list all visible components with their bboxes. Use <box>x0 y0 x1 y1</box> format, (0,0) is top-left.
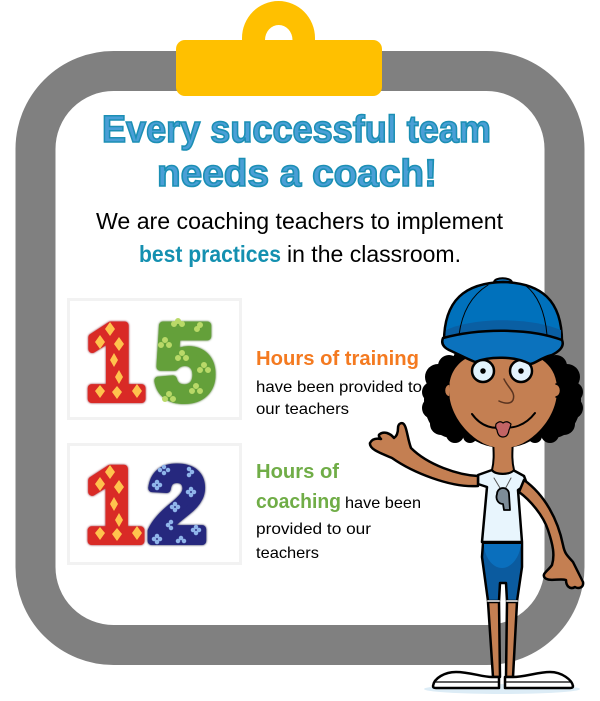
stat: hours of training: our teachers <box>256 401 349 418</box>
shirt <box>478 470 527 542</box>
ears <box>444 384 560 397</box>
cap <box>442 278 563 364</box>
lips <box>496 422 511 437</box>
shorts <box>482 543 522 601</box>
subtitle <box>96 208 504 267</box>
eyes <box>472 360 532 382</box>
character: coach <box>370 278 583 694</box>
mouth <box>472 413 535 428</box>
title <box>102 109 491 195</box>
digit 2: 2 <box>148 447 206 564</box>
shoes <box>433 672 573 688</box>
right arm <box>519 480 583 588</box>
left arm <box>370 423 478 486</box>
stat: hours of training: have been provided to <box>256 379 422 396</box>
number card: 15 <box>68 300 240 422</box>
stat: hours of coaching <box>256 461 421 562</box>
stat: hours of coaching: provided to our <box>256 521 372 538</box>
legs <box>488 602 517 677</box>
digit 5: 5 <box>155 302 215 422</box>
stat: hours of coaching: teachers <box>256 545 319 562</box>
stat: hours of training <box>256 348 422 418</box>
whistle <box>494 478 511 510</box>
digit 1: 1 <box>85 302 145 422</box>
clipboard clip <box>176 1 382 96</box>
subtitle: best practices <box>139 241 281 267</box>
title: needs a coach! <box>157 153 437 195</box>
stat: hours of coaching: coaching <box>256 491 341 513</box>
neck <box>492 440 514 474</box>
nose <box>499 379 514 403</box>
stat: hours of coaching: have been <box>345 495 421 512</box>
ground shadow <box>424 684 580 694</box>
stat: hours of training: Hours of training <box>256 348 419 370</box>
clipboard frame <box>36 71 564 645</box>
digit 1: 1 <box>85 447 143 564</box>
stat: hours of coaching: Hours of <box>256 461 339 483</box>
subtitle: We are coaching teachers to implement <box>96 208 504 234</box>
subtitle: in the classroom. <box>287 241 461 267</box>
hair <box>422 332 583 448</box>
number card: 12 <box>68 444 240 564</box>
title: Every successful team <box>102 109 491 151</box>
face <box>449 350 557 447</box>
